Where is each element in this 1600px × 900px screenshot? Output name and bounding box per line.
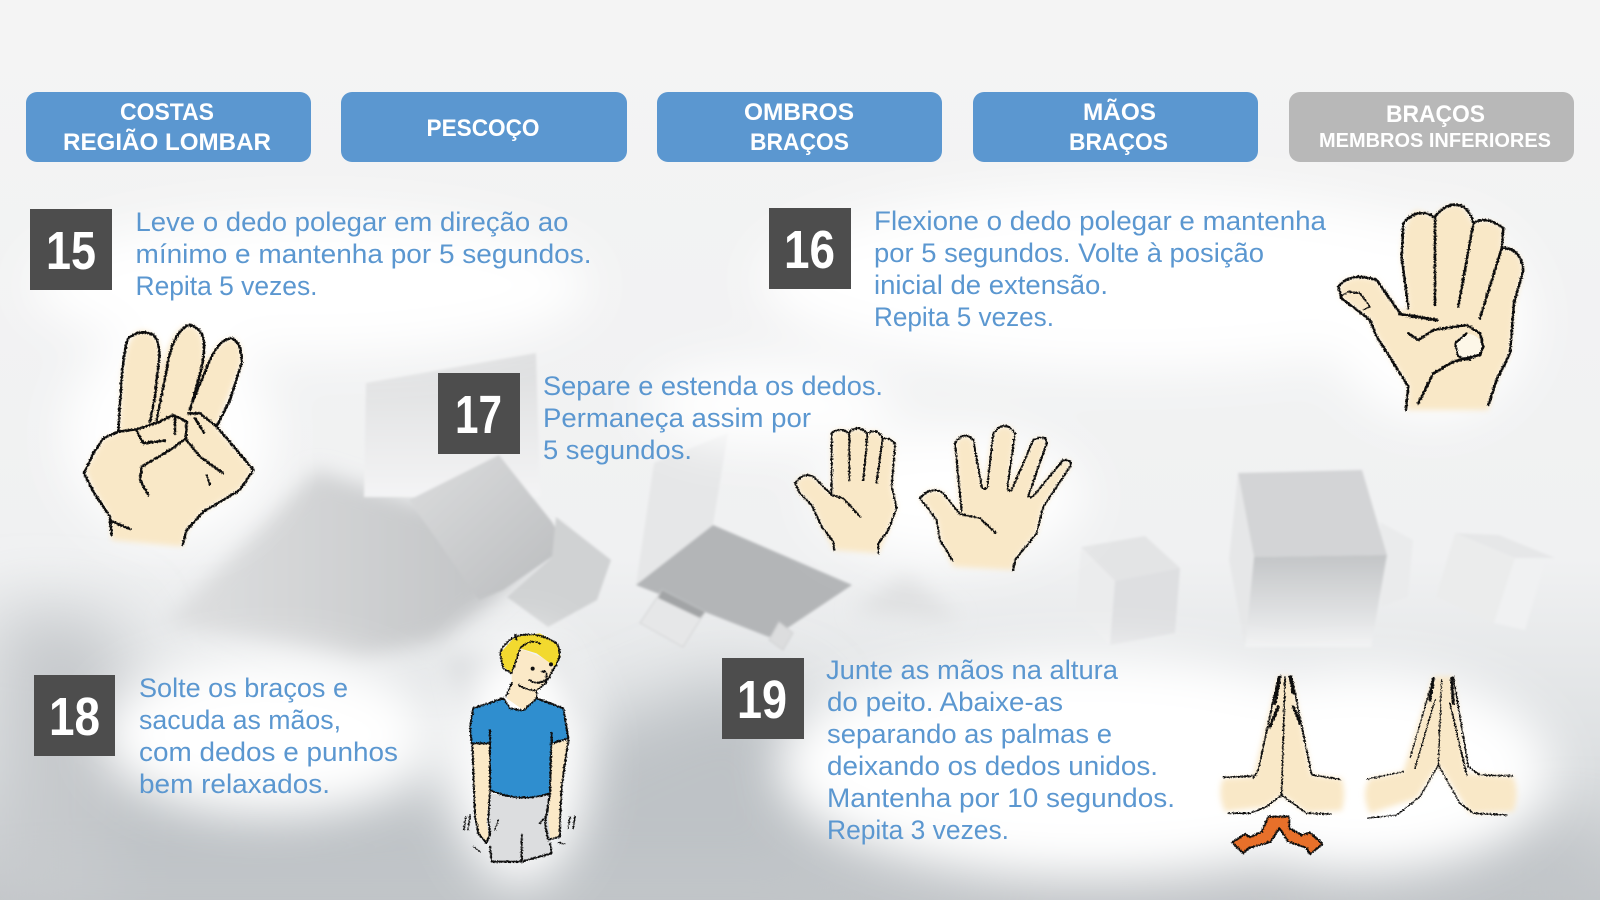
header tab: ombros e braços bbox=[657, 92, 942, 162]
header tab: pescoço bbox=[341, 92, 627, 162]
step 19 instructions: Repita 3 vezes. bbox=[827, 815, 1009, 845]
header tab: braços e membros inferiores (inactive) bbox=[1289, 92, 1574, 162]
header tab: mãos e braços bbox=[973, 92, 1258, 162]
header tab: ombros e braços: BRAÇOS bbox=[750, 129, 849, 156]
boy: blue shirt bbox=[470, 698, 568, 798]
step 17 instructions: Separe e estenda os dedos. bbox=[543, 371, 883, 401]
step 15 instructions: Repita 5 vezes. bbox=[136, 271, 318, 301]
illustration: hand touching thumb to little finger bbox=[84, 325, 253, 547]
step 16 instructions: Repita 5 vezes. bbox=[874, 302, 1054, 332]
header tab: mãos e braços: BRAÇOS bbox=[1069, 129, 1168, 156]
step 18 number badge bbox=[34, 675, 115, 756]
step 17 instructions: 5 segundos. bbox=[543, 435, 692, 465]
step 16 instructions: por 5 segundos. Volte à posição bbox=[874, 238, 1264, 268]
step 19 instructions: Mantenha por 10 segundos. bbox=[827, 783, 1175, 813]
step 16 instructions: Flexione o dedo polegar e mantenha bbox=[874, 206, 1327, 236]
step 15 number badge: 15 bbox=[46, 221, 96, 281]
step 18 instructions: Solte os braços e bbox=[139, 673, 348, 703]
step 18 number badge: 18 bbox=[49, 687, 100, 747]
orange arrow bbox=[1232, 817, 1323, 854]
step 15 number badge bbox=[30, 209, 112, 290]
step 16 instructions: inicial de extensão. bbox=[874, 270, 1108, 300]
step 19 instructions: Junte as mãos na altura bbox=[826, 655, 1119, 685]
header tab: pescoço: PESCOÇO bbox=[426, 115, 540, 142]
boy: eyes bbox=[531, 662, 553, 671]
step 15 instructions bbox=[136, 207, 592, 301]
step 19 instructions: separando as palmas e bbox=[827, 719, 1112, 749]
illustration: hand with bent thumb bbox=[1338, 205, 1523, 410]
step 18 instructions: bem relaxados. bbox=[139, 769, 330, 799]
step 19 instructions: do peito. Abaixe-as bbox=[827, 687, 1063, 717]
header tab: braços e membros inferiores (inactive): MEMBROS INFERIORES bbox=[1319, 129, 1551, 152]
step 17 instructions: Permaneça assim por bbox=[543, 403, 811, 433]
illustration: boy shaking relaxed hands bbox=[464, 633, 575, 862]
header tab: mãos e braços: MÃOS bbox=[1083, 98, 1156, 126]
step 18 instructions: com dedos e punhos bbox=[139, 737, 398, 767]
step 19 instructions: deixando os dedos unidos. bbox=[827, 751, 1158, 781]
illustration: praying hands with orange arrow bbox=[1220, 677, 1517, 854]
boy: shorts bbox=[487, 793, 552, 862]
step 17 number badge bbox=[438, 373, 520, 454]
illustration: two open hands, fingers together and spread bbox=[795, 426, 1071, 570]
step 19 number badge bbox=[722, 658, 804, 739]
step 16 number badge: 16 bbox=[784, 220, 835, 280]
header tab: braços e membros inferiores (inactive): BRAÇOS bbox=[1386, 101, 1485, 128]
boy: yellow hair bbox=[500, 633, 561, 673]
header tab: costas e região lombar: COSTAS bbox=[120, 99, 214, 126]
step 17 instructions bbox=[543, 371, 883, 465]
step 16 instructions bbox=[874, 206, 1327, 332]
header tab: ombros e braços: OMBROS bbox=[744, 99, 854, 126]
step 15 instructions: mínimo e mantenha por 5 segundos. bbox=[136, 239, 592, 269]
step 18 instructions: sacuda as mãos, bbox=[139, 705, 341, 735]
step 16 number badge bbox=[769, 208, 851, 289]
step 18 instructions bbox=[139, 673, 398, 799]
boy: skin bbox=[472, 648, 568, 843]
step 19 instructions bbox=[826, 655, 1175, 845]
step 17 number badge: 17 bbox=[455, 385, 502, 445]
header tab: costas e região lombar: REGIÃO LOMBAR bbox=[63, 128, 271, 156]
header tab: costas e região lombar bbox=[26, 92, 311, 162]
step 19 number badge: 19 bbox=[737, 670, 787, 730]
step 15 instructions: Leve o dedo polegar em direção ao bbox=[136, 207, 568, 237]
